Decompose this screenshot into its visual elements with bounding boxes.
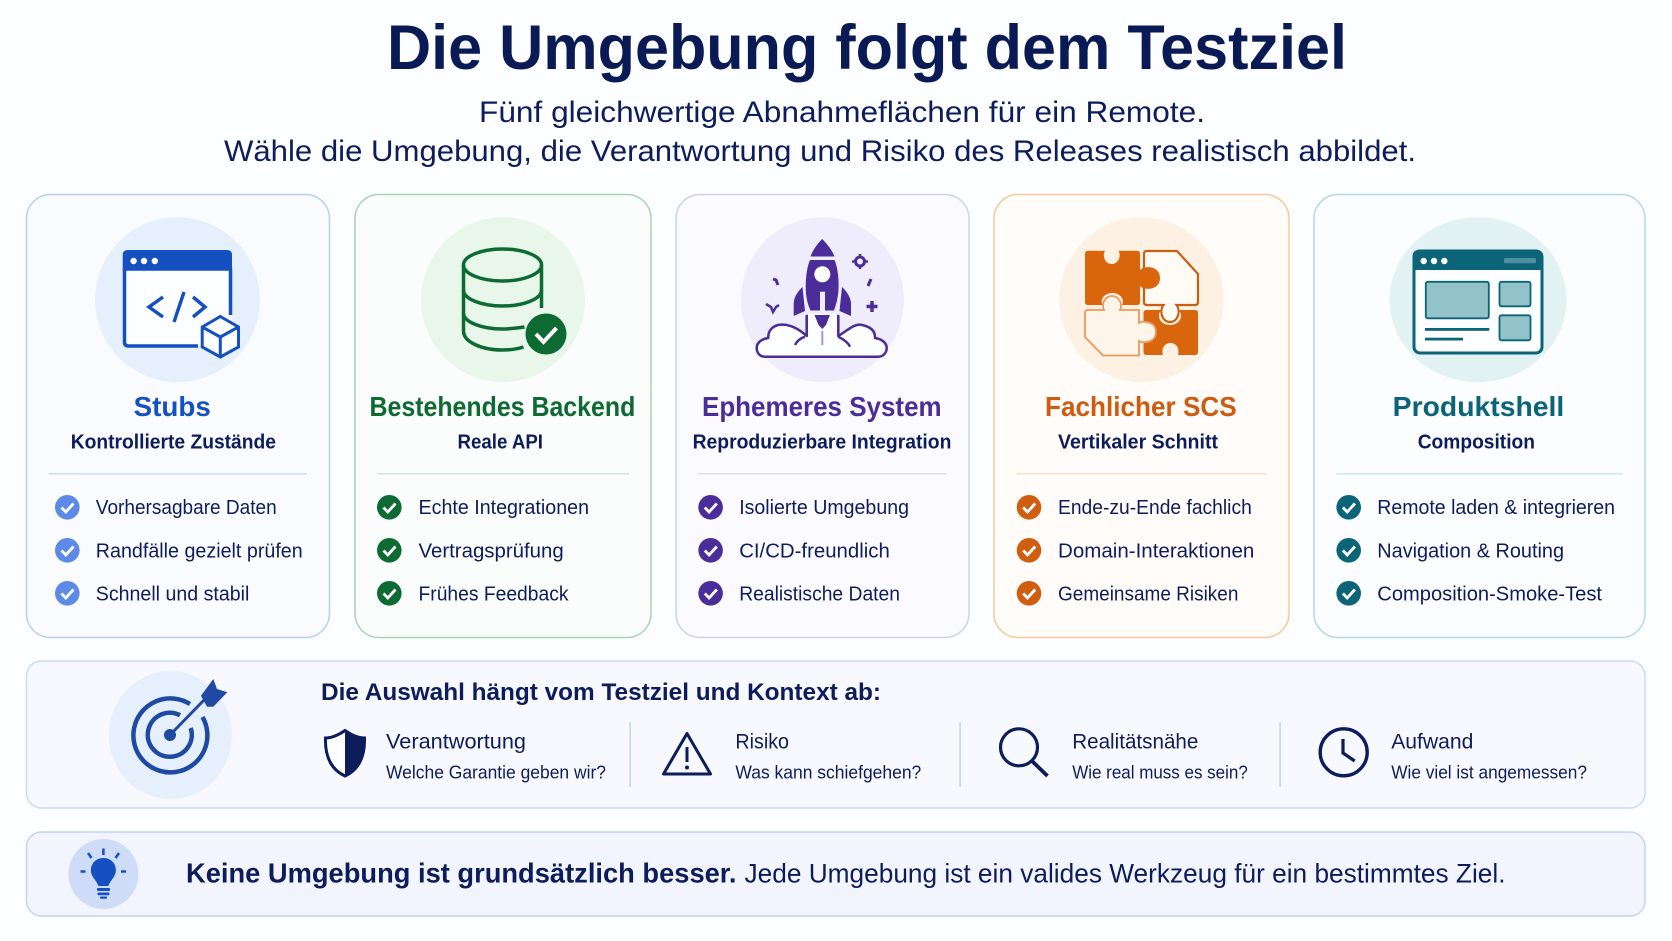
panel: Produktshell <box>1314 194 1645 638</box>
checklist: Domain-Interaktionen <box>1058 539 1254 562</box>
checklist <box>377 495 589 606</box>
checklist: Realistische Daten <box>739 583 900 606</box>
icon: puzzle <box>1085 251 1198 356</box>
criterion: Aufwand <box>1320 729 1587 782</box>
criterion: Realitätsnähe: Wie real muss es sein? <box>1072 761 1248 782</box>
icon: light bulb <box>80 848 126 899</box>
callout: key message <box>26 832 1645 916</box>
icon: target with arrow <box>133 679 227 772</box>
panel: Ephemeres System <box>676 194 969 638</box>
checklist: Gemeinsame Risiken <box>1058 583 1238 606</box>
criteria heading: Die Auswahl hängt vom Testziel und Kontext ab: <box>321 679 881 706</box>
criterion: Realitätsnähe <box>1000 729 1248 782</box>
panel: Fachlicher SCS <box>994 194 1289 638</box>
subtitle: Wähle die Umgebung, die Verantwortung und Risiko des Releases realistisch abbildet. <box>224 135 1416 168</box>
checklist: Randfälle gezielt prüfen <box>96 539 303 562</box>
subtitle <box>224 96 1416 168</box>
checklist: Ende-zu-Ende fachlich <box>1058 496 1252 519</box>
key message text: Keine Umgebung ist grundsätzlich besser. <box>186 858 736 889</box>
criterion: Verantwortung: Welche Garantie geben wir? <box>386 761 606 782</box>
checklist: Vorhersagbare Daten <box>96 496 277 519</box>
checklist: Composition-Smoke-Test <box>1377 583 1602 606</box>
checklist: Vertragsprüfung <box>418 539 564 562</box>
key message text <box>186 858 1506 889</box>
criterion: Risiko: Risiko <box>735 730 789 754</box>
card subheading: Composition <box>1418 432 1535 454</box>
checklist: Frühes Feedback <box>418 583 569 606</box>
panel: Bestehendes Backend <box>355 194 651 638</box>
card subheading: Reale API <box>458 432 543 454</box>
card subheading: Reproduzierbare Integration <box>693 432 951 454</box>
panel: selection criteria <box>26 661 1645 808</box>
criterion: Aufwand: Wie viel ist angemessen? <box>1391 761 1587 782</box>
checklist: Echte Integrationen <box>418 496 589 519</box>
checklist <box>698 495 909 606</box>
title: Die Umgebung folgt dem Testziel <box>387 13 1347 83</box>
panel: Stubs <box>26 194 330 638</box>
card subheading: Kontrollierte Zustände <box>71 432 276 454</box>
checklist <box>1017 495 1254 606</box>
checklist <box>55 495 303 606</box>
checklist: Remote laden & integrieren <box>1377 496 1615 519</box>
criterion: Aufwand: Aufwand <box>1391 730 1473 754</box>
card heading: Stubs <box>134 391 211 422</box>
card heading: Fachlicher SCS <box>1045 391 1237 422</box>
icon: app shell window <box>1413 250 1543 353</box>
icon: database with check <box>464 249 566 354</box>
checklist: Navigation & Routing <box>1377 539 1564 562</box>
criterion: Verantwortung <box>325 730 606 782</box>
key message text: Jede Umgebung ist ein valides Werkzeug für ein bestimmtes Ziel. <box>744 859 1506 889</box>
criterion: Risiko: Was kann schiefgehen? <box>735 761 921 782</box>
card heading: Ephemeres System <box>702 391 942 422</box>
subtitle: Fünf gleichwertige Abnahmeflächen für ein Remote. <box>479 96 1205 129</box>
checklist: Isolierte Umgebung <box>739 496 909 519</box>
icon: rocket <box>757 239 887 357</box>
checklist: CI/CD-freundlich <box>739 539 890 562</box>
checklist <box>1336 495 1615 606</box>
card heading: Produktshell <box>1393 391 1564 422</box>
checklist: Schnell und stabil <box>96 583 249 606</box>
criterion: Realitätsnähe: Realitätsnähe <box>1072 730 1198 754</box>
criterion: Risiko <box>664 730 921 782</box>
criterion: Verantwortung: Verantwortung <box>386 730 526 754</box>
card heading: Bestehendes Backend <box>370 391 635 422</box>
icon: browser with code and cube <box>123 250 238 357</box>
card subheading: Vertikaler Schnitt <box>1058 432 1218 454</box>
